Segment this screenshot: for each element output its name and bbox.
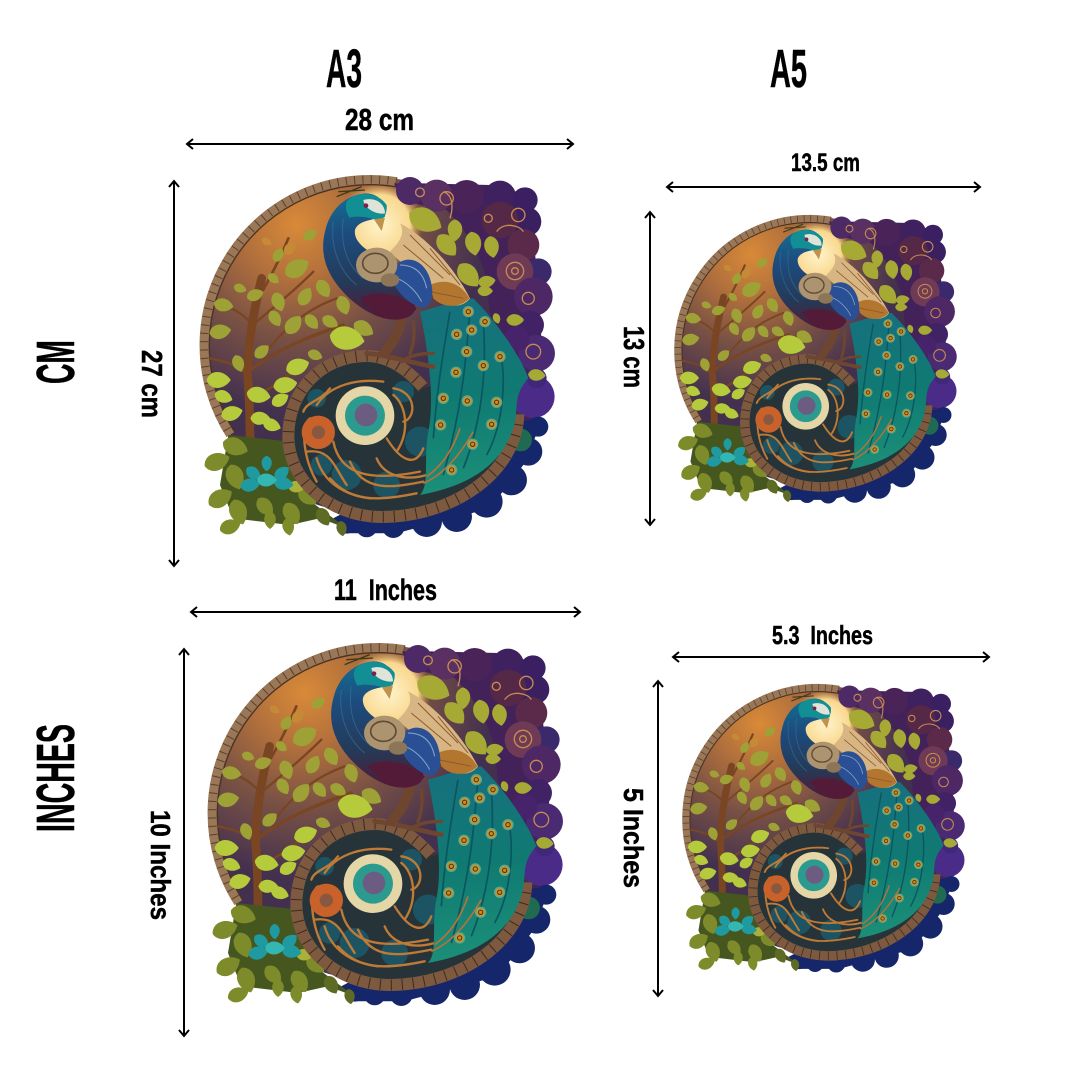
arrow: A5 width inches bbox=[673, 652, 989, 662]
puzzle: A5 inches bbox=[684, 685, 965, 973]
label: 13.5 cm: 13.5 cm bbox=[791, 149, 860, 177]
arrow: A3 height inches bbox=[179, 649, 189, 1036]
label: 5.3 Inches: 5.3 Inches bbox=[772, 620, 873, 650]
heading: A3: A3 bbox=[326, 39, 362, 99]
label: 28 cm: 28 cm bbox=[345, 102, 414, 137]
arrow: A3 height cm bbox=[169, 181, 179, 566]
label: 11 Inches: 11 Inches bbox=[334, 574, 437, 607]
arrow: A5 height cm bbox=[645, 212, 655, 525]
row label: CM: CM bbox=[26, 340, 86, 384]
puzzle: A3 centimetres bbox=[202, 177, 555, 538]
puzzle: A5 centimetres bbox=[676, 216, 957, 504]
label: 27 cm: 27 cm bbox=[135, 350, 167, 418]
label: 10 Inches: 10 Inches bbox=[145, 810, 176, 920]
arrow: A3 width inches bbox=[191, 607, 580, 617]
arrow: A3 width cm bbox=[187, 139, 573, 149]
puzzle: A3 inches bbox=[210, 645, 563, 1006]
arrow: A5 width cm bbox=[667, 182, 980, 192]
heading: A5: A5 bbox=[770, 39, 807, 99]
arrow: A5 height inches bbox=[653, 681, 663, 996]
label: 5 Inches: 5 Inches bbox=[618, 788, 649, 888]
label: 13 cm: 13 cm bbox=[617, 326, 649, 388]
row label: INCHES: INCHES bbox=[26, 724, 86, 832]
